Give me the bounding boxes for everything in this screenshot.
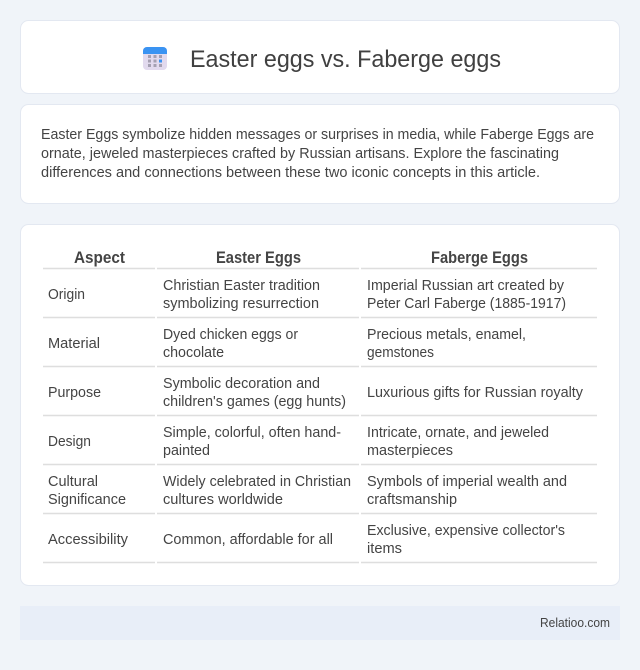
row: origin: Christian Easter tradition — [163, 278, 320, 294]
row: design: Simple, colorful, often hand- — [163, 425, 341, 441]
row: purpose: children's games (egg hunts) — [163, 394, 346, 410]
row: purpose — [48, 376, 584, 410]
row: purpose: Purpose — [48, 385, 101, 401]
row: cultural significance: Cultural — [48, 474, 98, 490]
row: accessibility: Exclusive, expensive collector's — [367, 523, 565, 539]
table header: Easter Eggs — [216, 249, 301, 267]
row: cultural significance: craftsmanship — [367, 492, 457, 508]
panel: introduction — [20, 104, 620, 204]
row: material — [48, 327, 526, 361]
row: design: masterpieces — [367, 443, 453, 459]
intro text: ornate, jeweled masterpieces crafted by Russian artisans. Explore the fascinating — [41, 146, 559, 162]
row: material: Precious metals, enamel, — [367, 327, 526, 343]
row: accessibility — [48, 523, 565, 557]
intro text: differences and connections between these two iconic concepts in this article. — [41, 165, 540, 181]
row: design: painted — [163, 443, 210, 459]
row: cultural significance — [48, 474, 567, 508]
row: cultural significance: Significance — [48, 492, 126, 508]
row: origin: symbolizing resurrection — [163, 296, 319, 312]
row: material: Dyed chicken eggs or — [163, 327, 298, 343]
row: cultural significance: Widely celebrated in Christian — [163, 474, 351, 490]
row: design: Intricate, ornate, and jeweled — [367, 425, 549, 441]
row: origin: Peter Carl Faberge (1885-1917) — [367, 296, 566, 312]
table header: Faberge Eggs — [431, 249, 528, 267]
footer credit: Relatioo.com — [540, 616, 610, 630]
footer — [20, 606, 620, 640]
title: Easter eggs vs. Faberge eggs — [190, 46, 501, 73]
row: accessibility: Accessibility — [48, 532, 129, 548]
row: origin — [48, 278, 566, 312]
row: purpose: Luxurious gifts for Russian royalty — [367, 385, 584, 401]
row: origin: Imperial Russian art created by — [367, 278, 565, 294]
panel: title header — [20, 20, 620, 94]
row: accessibility: items — [367, 541, 402, 557]
row: origin: Origin — [48, 287, 85, 303]
row: accessibility: Common, affordable for all — [163, 532, 333, 548]
panel: comparison table — [20, 224, 620, 586]
table header — [74, 249, 528, 267]
row: design: Design — [48, 434, 91, 450]
row: cultural significance: Symbols of imperial wealth and — [367, 474, 567, 490]
row: cultural significance: cultures worldwide — [163, 492, 283, 508]
intro text — [41, 127, 594, 181]
intro text: Easter Eggs symbolize hidden messages or surprises in media, while Faberge Eggs are — [41, 127, 594, 143]
row: material: gemstones — [367, 345, 434, 361]
row: design — [48, 425, 549, 459]
icon: calendar — [143, 47, 167, 70]
table header: Aspect — [74, 249, 125, 267]
row: material: Material — [48, 336, 100, 352]
row: material: chocolate — [163, 345, 224, 361]
row: purpose: Symbolic decoration and — [163, 376, 320, 392]
